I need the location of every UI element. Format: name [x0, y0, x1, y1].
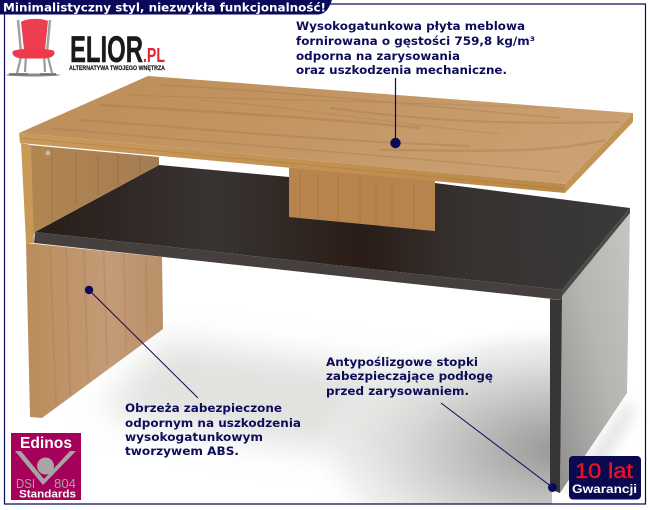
badge: Edinos DSI 804 Standards	[11, 433, 81, 500]
badge: Edinos DSI 804 Standards: DSI	[16, 476, 35, 491]
callout text: edges: Obrzeża zabezpieczone	[125, 401, 282, 415]
leader line: board	[390, 78, 401, 148]
left leg upper	[29, 145, 159, 240]
badge: Edinos DSI 804 Standards: Edinos	[20, 435, 72, 452]
callout text: board: oraz uszkodzenia mechaniczne.	[296, 63, 507, 77]
badge: 10 lat warranty: 10 lat	[575, 459, 633, 483]
table top	[19, 76, 633, 193]
middle support panel	[289, 165, 435, 233]
floor shadow	[100, 325, 636, 504]
leader line: edges	[85, 286, 198, 398]
table top side edge	[565, 113, 633, 193]
right leg	[550, 208, 630, 493]
callout text: board: Wysokogatunkowa płyta meblowa	[296, 19, 525, 33]
coffee table	[19, 76, 633, 493]
logo tagline: ALTERNATYWA TWOJEGO WNĘTRZA	[69, 65, 165, 72]
callout text: edges: wysokogatunkowym	[125, 430, 263, 444]
callout: table top	[296, 19, 535, 148]
callout text: board	[296, 19, 535, 77]
callout text: edges	[125, 401, 301, 458]
logo: Elior.pl	[6, 19, 165, 76]
badge: Edinos DSI 804 Standards: 804	[54, 476, 76, 491]
badge: 10 lat warranty: Gwarancji	[572, 482, 637, 496]
callout text: feet	[326, 355, 493, 398]
callout: edges	[85, 286, 301, 458]
title banner: Minimalistyczny styl, niezwykła funkcjonalność!	[3, 0, 326, 14]
callout text: edges: tworzywem ABS.	[125, 444, 239, 458]
callout text: feet: przed zarysowaniem.	[326, 384, 469, 398]
icon: red chair	[6, 19, 60, 76]
table top front edge	[19, 133, 565, 193]
callout text: feet: Antypoślizgowe stopki	[326, 355, 478, 369]
left leg front edge	[21, 143, 34, 243]
left leg lower	[26, 243, 163, 418]
callout text: feet: zabezpieczające podłogę	[326, 369, 493, 383]
logo suffix: .PL	[143, 45, 165, 67]
badge: Edinos DSI 804 Standards: Standards	[19, 488, 76, 500]
callout text: board: fornirowana o gęstości 759,8 kg/m³	[296, 34, 535, 48]
callout: feet	[326, 355, 557, 492]
callout text: edges: odpornym na uszkodzenia	[125, 416, 301, 430]
badge: 10 lat warranty	[569, 456, 641, 500]
shelf	[34, 165, 630, 300]
callout text: board: odporna na zarysowania	[296, 49, 460, 63]
logo wordmark: ELIOR	[70, 29, 143, 70]
leader line: feet	[441, 403, 557, 492]
